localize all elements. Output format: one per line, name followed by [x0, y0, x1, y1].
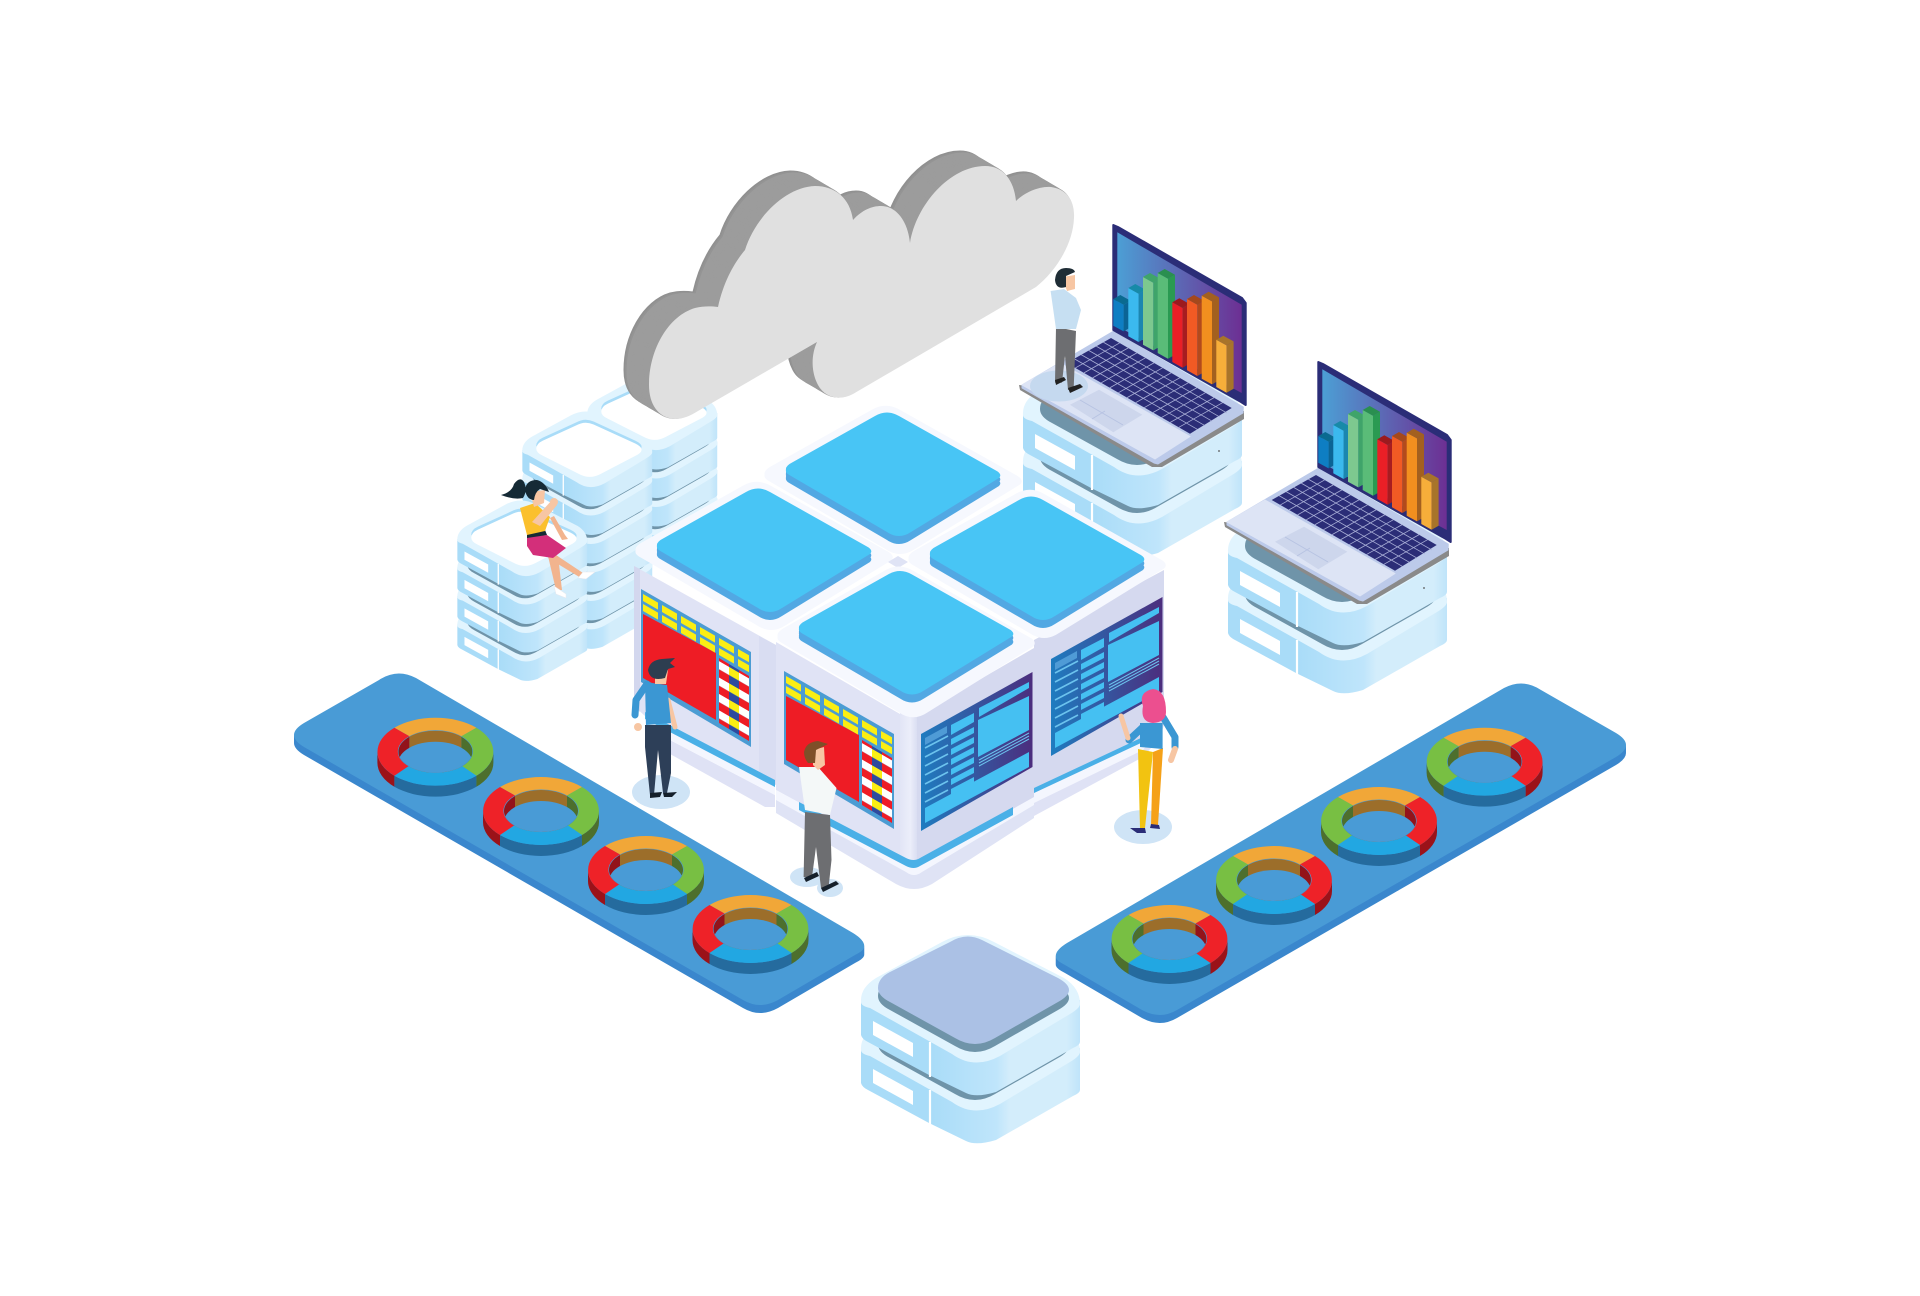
donut chart 4: [692, 895, 808, 974]
cloud: [624, 151, 1074, 419]
donut chart 1: [377, 718, 493, 797]
building: front block: [776, 567, 1035, 889]
person: man standing on laptop: [1030, 268, 1088, 402]
screen: left block table: [641, 589, 751, 747]
donut chart 2: [483, 777, 599, 856]
tile: right: [930, 496, 1144, 628]
donut chart 3: [588, 836, 704, 915]
tile: left: [657, 488, 871, 620]
person: woman sitting on stack: [501, 479, 595, 598]
donut chart 1: [1427, 728, 1543, 807]
person: man in white shirt: [790, 741, 843, 897]
panel: right donut bar: [1056, 683, 1626, 1023]
server stack: bottom with periwinkle top: [861, 935, 1080, 1143]
server stack: back right: [587, 374, 717, 555]
laptop on server stack: upper: [1019, 225, 1246, 556]
screen: right block dashboard: [1051, 597, 1162, 756]
centre gap diamond: [888, 556, 908, 568]
server stack: left: [457, 500, 587, 681]
tile: front: [799, 571, 1013, 702]
server stack: back middle: [522, 411, 652, 649]
building: back block platform: [764, 406, 1022, 554]
building: left block: [634, 482, 893, 807]
building: right block: [908, 490, 1166, 816]
panel: left donut bar: [294, 673, 864, 1013]
person: woman with pink hair: [1114, 689, 1175, 844]
screen: front block dashboard: [921, 672, 1032, 831]
tile: back: [786, 412, 1000, 544]
donut chart 2: [1321, 787, 1437, 866]
screen: front block table: [784, 671, 894, 829]
person: man in blue shirt: [632, 658, 690, 809]
laptop on server stack: lower: [1224, 362, 1451, 693]
donut chart 3: [1216, 846, 1332, 925]
donut chart 4: [1112, 905, 1228, 984]
